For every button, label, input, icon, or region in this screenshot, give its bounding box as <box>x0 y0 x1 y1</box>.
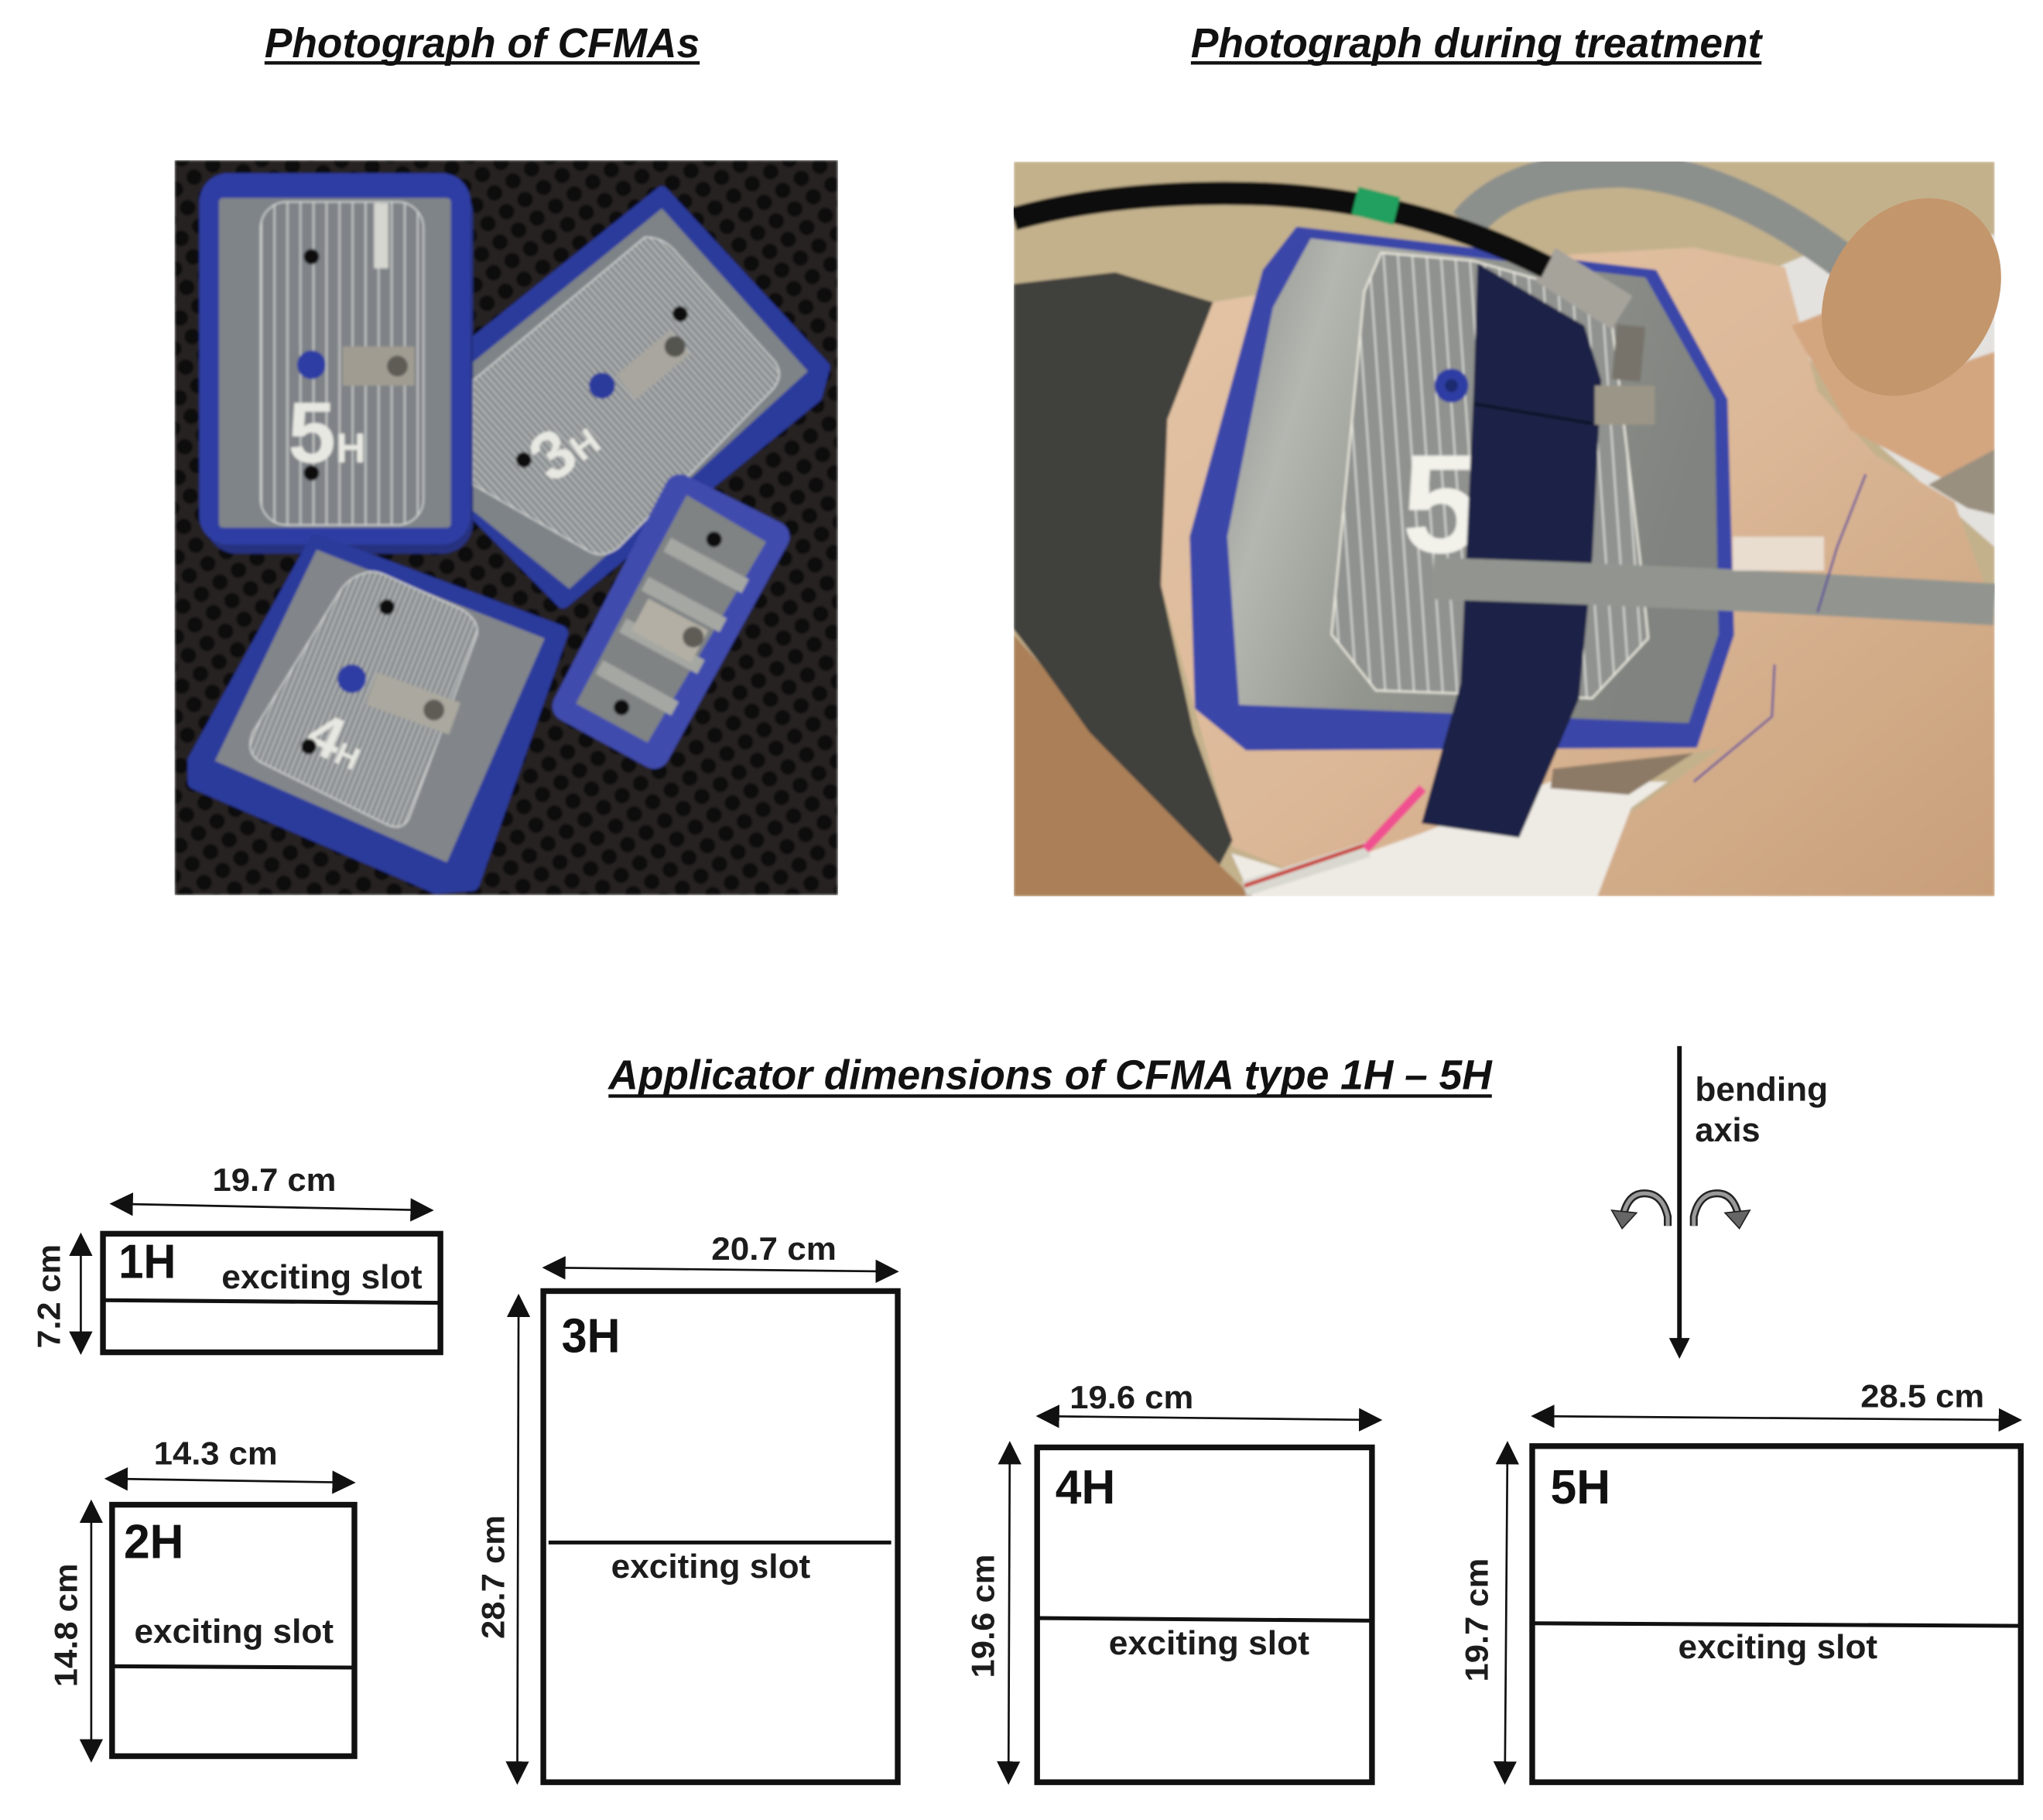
bending axis arrow <box>1679 1046 1828 1342</box>
bed sheet top right <box>1780 233 1995 548</box>
diagram: type 2H: 2H <box>124 1516 183 1569</box>
diagram: type 1H: 19.7 cm <box>212 1161 336 1198</box>
applicator 5H <box>200 173 473 554</box>
title: photograph during treatment: Photograph during treatment <box>1191 20 1763 67</box>
tape <box>1733 537 1824 570</box>
diagram: type 5H: 5H <box>1551 1461 1610 1514</box>
title: applicator dimensions: Applicator dimensions of CFMA type 1H – 5H <box>607 1052 1493 1098</box>
strap <box>1422 263 1601 838</box>
icon: bending arrow right <box>1694 1193 1750 1229</box>
height dimension <box>517 1296 518 1782</box>
torso and arm skin <box>1161 248 1995 896</box>
height dimension <box>1505 1443 1507 1782</box>
applicator 3H <box>473 193 823 602</box>
width dimension <box>545 1268 896 1271</box>
diagram: type 4H: 19.6 cm <box>1069 1379 1193 1415</box>
connector <box>1545 265 1655 425</box>
diagram: type 5H: 19.7 cm <box>1459 1558 1495 1682</box>
diagram: type 4H: 4H <box>1056 1461 1115 1514</box>
diagram: type 3H: 28.7 cm <box>475 1515 512 1639</box>
label 4H: 4H <box>297 699 375 782</box>
lower arm <box>1014 635 1252 896</box>
label 5H: 5H <box>288 385 366 481</box>
photo: CFMA applicators on foam <box>175 160 838 895</box>
diagram: type 1H: exciting slot <box>221 1258 423 1296</box>
width dimension <box>107 1479 353 1483</box>
diagram: type 3H: 3H <box>562 1310 620 1363</box>
width dimension <box>112 1204 431 1210</box>
height dimension <box>80 1235 81 1353</box>
diagram: type 2H: 14.8 cm <box>47 1563 84 1687</box>
diagram: type 3H <box>475 1230 898 1782</box>
black cable <box>1014 193 1546 267</box>
shorts <box>1014 272 1233 865</box>
tube lower <box>1433 579 1995 604</box>
label: bending axis: bending <box>1695 1071 1828 1109</box>
applicator 4H <box>196 542 560 886</box>
bed sheet bottom <box>1231 782 1668 896</box>
skin fold below applicator <box>1551 753 1694 795</box>
height dimension <box>1008 1443 1010 1782</box>
diagram: type 5H: 28.5 cm <box>1860 1377 1984 1414</box>
diagram: type 4H: 19.6 cm <box>965 1555 1001 1678</box>
skin marks <box>1694 474 1866 782</box>
wires <box>1244 789 1423 888</box>
diagram: type 2H: exciting slot <box>134 1613 334 1651</box>
applicator 1H <box>568 490 774 753</box>
anonymising face oval <box>1785 165 2038 429</box>
diagram: type 2H: 14.3 cm <box>154 1435 278 1471</box>
tube upper <box>1467 169 1850 267</box>
diagram: type 5H <box>1459 1377 2021 1782</box>
label 3H: 3H <box>515 398 611 497</box>
diagram: type 4H: exciting slot <box>1109 1624 1309 1662</box>
diagram: type 3H: exciting slot <box>611 1548 811 1586</box>
photo: applicator during treatment <box>1014 162 1995 896</box>
width dimension <box>1039 1416 1380 1420</box>
title: photograph of CFMAs: Photograph of CFMAs <box>265 20 700 67</box>
diagram: type 5H: exciting slot <box>1679 1628 1878 1666</box>
icon: bending arrow left <box>1612 1193 1668 1229</box>
neck <box>1791 313 1995 484</box>
diagram: type 3H: 20.7 cm <box>711 1230 837 1267</box>
diagram: type 1H <box>30 1161 440 1353</box>
height dimension <box>91 1502 92 1760</box>
bending axis arrow: axis <box>1695 1111 1761 1149</box>
diagram: type 2H <box>47 1435 354 1760</box>
diagram: type 1H: 7.2 cm <box>30 1244 67 1349</box>
applicator 5H <box>1193 229 1732 748</box>
green tape <box>1355 200 1397 211</box>
label 5: 5 <box>1402 425 1480 583</box>
diagram: type 4H <box>965 1379 1380 1782</box>
diagram: type 1H: 1H <box>118 1236 176 1289</box>
width dimension <box>1534 1416 2020 1420</box>
